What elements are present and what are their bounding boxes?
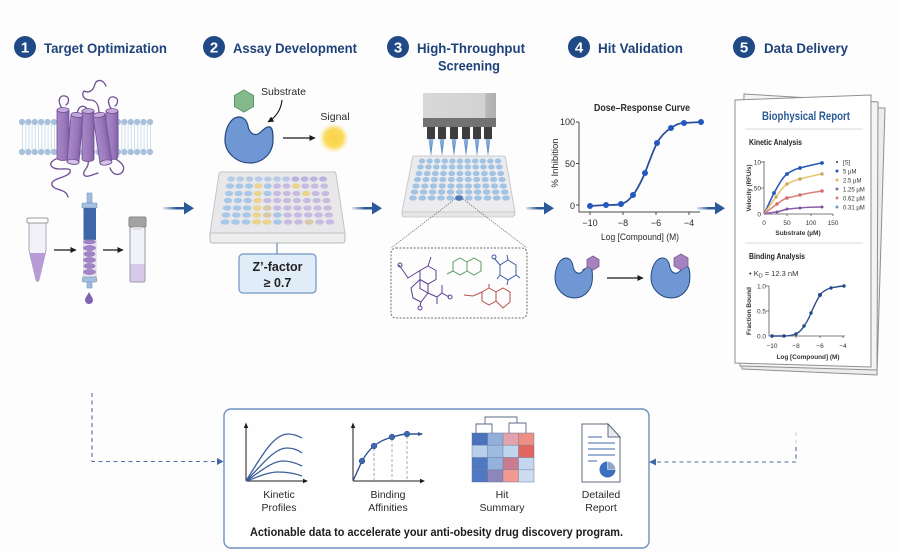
- panel: compound library: [391, 248, 527, 318]
- chart: dose-response curve: [550, 103, 704, 243]
- step 1 heading: Target Optimization: Target Optimization: [44, 40, 167, 56]
- label: Kinetic Profiles: [261, 489, 297, 514]
- arrow: binding step: [607, 277, 643, 279]
- kinetic legend: [S]: [843, 160, 851, 166]
- label: Hit Summary: [480, 489, 525, 514]
- kinetic analysis chart: 50: [783, 220, 791, 227]
- label: Kinetic Profiles: Profiles: [261, 502, 297, 514]
- report title: Biophysical Report: [762, 109, 850, 123]
- step 5 heading: Data Delivery: [733, 36, 848, 58]
- kinetic analysis chart: 0: [762, 220, 766, 227]
- binding analysis chart: D: [759, 274, 763, 280]
- chart: dose-response curve: 100: [560, 117, 575, 127]
- step 4 heading: Hit Validation: 4: [575, 40, 584, 56]
- label: Detailed Report: [582, 489, 620, 514]
- molecule: blue: [492, 255, 520, 285]
- illustration: membrane receptor: [22, 80, 154, 197]
- callout: Z'-factor: [239, 254, 316, 293]
- arrow: tube to column: [54, 249, 76, 251]
- chart title: Dose–Response Curve: [594, 103, 690, 114]
- illustration: substrate and enzyme: [225, 86, 350, 163]
- icon: chromatography column: [82, 193, 97, 304]
- kinetic analysis chart: Kinetic Analysis: [749, 138, 802, 147]
- molecule: red: [464, 284, 510, 308]
- zoom callout lines: [391, 199, 527, 248]
- step 1 heading: Target Optimization: [14, 36, 167, 58]
- arrow: step 3 to step 4: [526, 202, 554, 214]
- icon: enzyme with bound hit: [651, 254, 690, 298]
- assay plate: [210, 172, 345, 243]
- label: Binding Affinities: [368, 489, 408, 514]
- chart: dose-response curve: −8: [618, 218, 628, 228]
- binding analysis chart: −4: [839, 343, 847, 350]
- label: Detailed Report: Detailed: [582, 489, 620, 501]
- binding analysis chart: −6: [816, 343, 824, 350]
- chart: dose-response curve: % Inhibition: [550, 138, 561, 188]
- chart: dose-response curve: −6: [651, 218, 661, 228]
- arrow: step 2 to step 3: [352, 202, 382, 214]
- binding analysis chart: • K: [749, 269, 759, 278]
- molecule: green: [447, 258, 481, 275]
- binding analysis chart: = 12.3 nM: [763, 269, 798, 278]
- dashed arrow: left feedback to summary: [92, 393, 218, 462]
- label: Hit Summary: Summary: [480, 502, 525, 514]
- kinetic legend: 0.31 µM: [843, 206, 865, 212]
- kinetic legend: [836, 160, 865, 212]
- kinetic legend: 0.62 µM: [843, 196, 865, 202]
- arrow: step 1 to step 2: [163, 202, 194, 214]
- chart: dose-response curve: 50: [565, 159, 575, 169]
- chart: dose-response curve: −4: [684, 218, 694, 228]
- label: Substrate: Substrate: [261, 86, 306, 98]
- panel: deliverables summary: [224, 409, 649, 548]
- label: Signal: Signal: [320, 111, 350, 123]
- icon: substrate hexagon: [234, 90, 254, 112]
- step 2 heading: Assay Development: Assay Development: [233, 40, 357, 56]
- step 2 heading: Assay Development: 2: [210, 40, 218, 56]
- icon: signal glow: [319, 123, 349, 153]
- step 2 heading: Assay Development: [203, 36, 357, 58]
- icon: kinetic profiles: [244, 422, 308, 483]
- label: Binding Affinities: Binding: [370, 489, 406, 501]
- kinetic legend: 2.5 µM: [843, 178, 861, 184]
- kinetic analysis chart: Velocity (RFU/s): [746, 164, 753, 212]
- step 5 heading: Data Delivery: Data Delivery: [764, 40, 848, 56]
- label: Detailed Report: Report: [585, 502, 617, 514]
- chart: dose-response curve: 0: [570, 201, 575, 211]
- arrow: column to vial: [103, 249, 123, 251]
- binding analysis chart: 0.0: [757, 334, 766, 340]
- kinetic legend: 5 µM: [843, 170, 856, 176]
- kinetic legend: 1.25 µM: [843, 188, 865, 194]
- panel: biophysical report: [735, 94, 885, 375]
- step 1 heading: Target Optimization: 1: [21, 40, 29, 56]
- kinetic analysis chart: 50: [754, 186, 761, 192]
- screening plate: [402, 156, 515, 217]
- step 3 heading: High-Throughput Screening: [387, 36, 525, 74]
- binding analysis chart: 0.5: [757, 308, 766, 316]
- binding analysis chart: −8: [792, 343, 800, 350]
- chart: dose-response curve: −10: [582, 218, 598, 228]
- icon: enzyme with unbound hit: [555, 256, 599, 298]
- tagline: Actionable data to accelerate your anti-obesity drug discovery program.: [250, 527, 623, 539]
- binding analysis chart: Fraction Bound: [746, 287, 753, 335]
- kinetic analysis chart: Substrate (µM): [775, 230, 821, 237]
- icon: sample tube: [27, 218, 48, 282]
- step 5 heading: Data Delivery: 5: [740, 40, 748, 56]
- arrowhead: right feedback: [649, 458, 656, 466]
- binding analysis chart: Binding Analysis: [749, 252, 805, 261]
- kinetic analysis chart: [746, 138, 865, 237]
- illustration: liquid handler head: [423, 93, 496, 156]
- kinetic analysis chart: 150: [828, 220, 839, 227]
- binding analysis chart: −10: [766, 343, 778, 350]
- kinetic analysis chart: 10: [754, 160, 761, 166]
- label: Hit Summary: Hit: [496, 489, 508, 501]
- label: Kinetic Profiles: Kinetic: [263, 489, 295, 501]
- callout: Z'-factor: ≥ 0.7: [264, 276, 291, 290]
- step 3 heading: High-Throughput Screening: 3: [394, 40, 402, 56]
- molecule: purple: [398, 257, 452, 310]
- step 3 heading: High-Throughput Screening: High-Throughput: [417, 40, 525, 56]
- icon: purified sample vial: [129, 217, 146, 282]
- arrowhead: left feedback: [217, 458, 224, 465]
- step 3 heading: High-Throughput Screening: Screening: [438, 58, 500, 74]
- kinetic analysis chart: 0: [757, 212, 761, 218]
- label: Binding Affinities: Affinities: [368, 502, 408, 514]
- icon: hit summary heatmap: [472, 417, 534, 482]
- chart: dose-response curve: Log [Compound] (M): [601, 232, 679, 243]
- arrow: step 4 to step 5: [697, 202, 725, 214]
- icon: enzyme: [225, 117, 273, 163]
- dashed arrow: right feedback to summary: [656, 432, 796, 462]
- step 4 heading: Hit Validation: [568, 36, 683, 58]
- icon: detailed report document: [582, 424, 620, 482]
- binding analysis chart: 1.0: [757, 284, 766, 290]
- callout: Z'-factor: Z’-factor: [252, 260, 303, 274]
- icon: binding affinities: [351, 422, 425, 483]
- binding analysis chart: [746, 252, 847, 361]
- step 4 heading: Hit Validation: Hit Validation: [598, 40, 683, 56]
- binding analysis chart: Log [Compound] (M): [776, 354, 840, 361]
- kinetic analysis chart: 100: [806, 220, 817, 227]
